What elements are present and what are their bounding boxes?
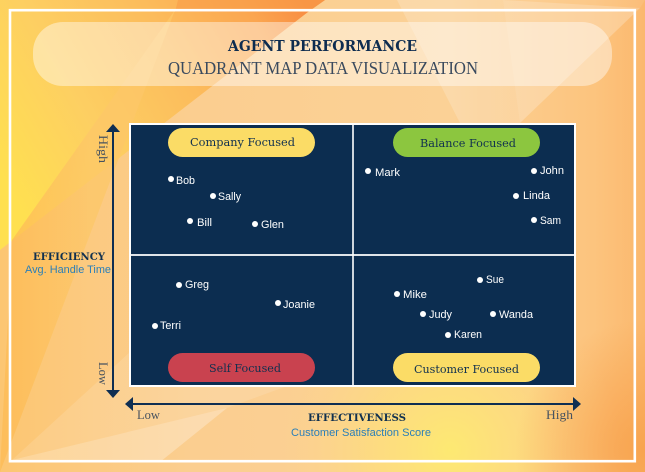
quadrant: customer focused: Customer Focused xyxy=(414,362,520,376)
quadrant map xyxy=(130,124,575,386)
quadrant: company focused: Company Focused xyxy=(190,135,296,149)
x axis title: Customer Satisfaction Score xyxy=(291,427,431,439)
quadrant: balance focused: Balance Focused xyxy=(420,136,517,150)
y axis title: Avg. Handle Time xyxy=(25,264,111,276)
quadrant: balance focused xyxy=(365,128,564,227)
y axis title xyxy=(25,251,111,276)
quadrant: customer focused: Wanda xyxy=(499,309,534,321)
quadrant: self focused: Terri xyxy=(160,320,181,332)
subtitle: QUADRANT MAP DATA VISUALIZATION xyxy=(168,58,478,78)
y axis arrow xyxy=(106,124,120,398)
quadrant: customer focused: Judy xyxy=(429,309,452,321)
quadrant: self focused xyxy=(152,279,315,382)
title: AGENT PERFORMANCE xyxy=(227,37,417,55)
quadrant: self focused: Greg xyxy=(185,279,209,291)
quadrant: self focused: Self Focused xyxy=(209,361,282,375)
quadrant: company focused xyxy=(168,128,315,231)
quadrant: company focused: Bob xyxy=(176,175,195,187)
quadrant: self focused: Joanie xyxy=(283,299,315,311)
y axis label: low: Low xyxy=(96,362,110,385)
quadrant: customer focused xyxy=(393,274,540,382)
x axis title: EFFECTIVENESS xyxy=(308,412,406,424)
x axis label: high: High xyxy=(546,408,574,422)
quadrant: customer focused: Mike xyxy=(403,289,427,301)
y axis label: high: High xyxy=(96,135,110,164)
x axis label: low: Low xyxy=(137,408,160,422)
quadrant: balance focused: Sam xyxy=(540,215,561,227)
quadrant: company focused: Sally xyxy=(218,191,241,203)
quadrant: customer focused: Karen xyxy=(454,329,482,341)
quadrant: customer focused: Sue xyxy=(486,274,504,286)
x axis arrow xyxy=(125,397,581,411)
quadrant: company focused: Bill xyxy=(197,217,212,229)
header banner xyxy=(33,22,612,86)
x axis title xyxy=(291,412,431,439)
quadrant: balance focused: Mark xyxy=(375,167,401,179)
quadrant: balance focused: Linda xyxy=(523,190,551,202)
quadrant: balance focused: John xyxy=(540,165,564,177)
y axis title: EFFICIENCY xyxy=(33,251,105,263)
quadrant: company focused: Glen xyxy=(261,219,284,231)
